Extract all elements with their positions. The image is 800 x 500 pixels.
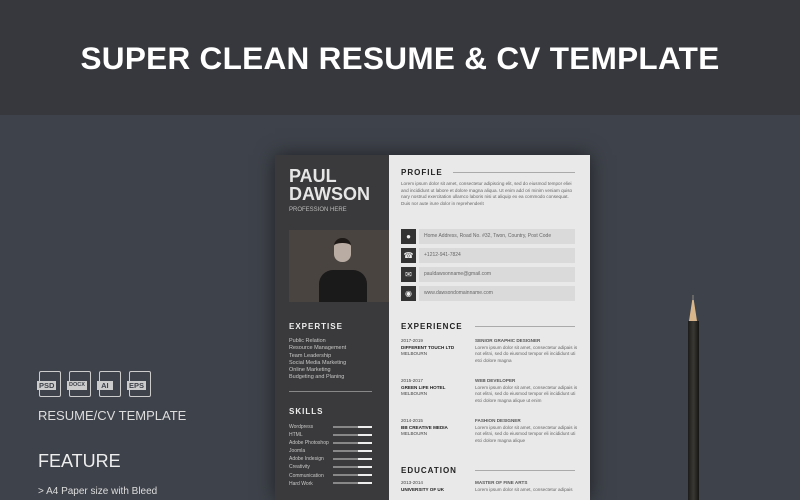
feature heading: FEATURE (38, 451, 121, 471)
education entry: MASTER OF FINE ARTS (475, 480, 527, 485)
icons: file formats: PSD (39, 381, 54, 390)
skills list with bars: HTML (289, 432, 303, 438)
subtitle: RESUME/CV TEMPLATE (38, 408, 186, 423)
skills list with bars: Creativity (289, 464, 310, 470)
contact list: www.dawsondomainname.com (424, 290, 493, 296)
name (289, 166, 370, 204)
education heading: EDUCATION (401, 466, 457, 475)
contact list: pauldawsonname@gmail.com (424, 271, 491, 277)
icons: file formats (37, 371, 151, 397)
pencil (688, 295, 699, 500)
contact list: ● (406, 232, 411, 241)
skills list with bars: Communication (289, 473, 324, 479)
contact list: ☎ (404, 251, 413, 260)
experience entries (401, 338, 577, 443)
header band (0, 0, 800, 115)
skills list with bars: Joomla (289, 448, 305, 454)
skills heading: SKILLS (289, 407, 323, 416)
contact list (401, 229, 575, 301)
expertise list: Budgeting and Planing (289, 374, 344, 380)
education entry: UNIVERSITY OF UK (401, 486, 444, 492)
expertise list: Public Relation (289, 338, 326, 344)
expertise list: Resource Management (289, 345, 346, 351)
experience entries: 2014-2015 (401, 418, 423, 423)
experience entries: SENIOR GRAPHIC DESIGNER (475, 338, 540, 343)
experience entries: 2015-2017 (401, 378, 423, 383)
name: DAWSON (289, 184, 370, 204)
expertise list: Social Media Marketing (289, 360, 346, 366)
experience entries: Lorem ipsum dolor sit amet, consectetur adipais is not elitni, sed do eiusmod tempor eli incididunt uti etci dolore magna alique ut enim (475, 384, 577, 402)
title: SUPER CLEAN RESUME & CV TEMPLATE (80, 40, 720, 76)
experience entries: MELBOURN (401, 351, 427, 356)
experience entries: 2017-2019 (401, 338, 423, 343)
profile text: Lorem ipsum dolor sit amet, consectetur adipiscing elit, sed do eiusmod tempor eliei and incididunt ut labore et dolore magna aliqua. Ut enim add ori minim veniam quiso nary nostrud exercitation ullamco laboris nisi ut aliquip ex ea commodo consequat. Duis nor aute irure dolor in reprehenderit (401, 181, 572, 206)
left info panel (37, 371, 186, 497)
icons: file formats: EPS (129, 381, 144, 390)
experience entries: GREEN LIFE HOTEL (401, 384, 445, 390)
name: PAUL (289, 166, 337, 186)
experience entries: MELBOURN (401, 391, 427, 396)
experience entries: BB CREATIVE MEDIA (401, 424, 448, 430)
contact list: +1212-941-7824 (424, 252, 461, 258)
expertise list: Online Marketing (289, 367, 331, 373)
experience entries: Lorem ipsum dolor sit amet, consectetur adipais is not elitni, sed do eiusmod tempor eli incididunt uti etci dolore magna alique (475, 424, 577, 442)
skills list with bars: Adobe Indesign (289, 456, 324, 462)
panel: left sidebar (275, 155, 389, 500)
photo (289, 230, 389, 302)
contact list: Home Address, Road No. #32, Twon, Country, Post Code (424, 233, 551, 239)
contact list: ◉ (405, 289, 412, 298)
contact list: ✉ (405, 270, 412, 279)
experience entries: DIFFERENT TOUCH LTD (401, 344, 454, 350)
skills list with bars: Hard Work (289, 481, 313, 487)
education entry: 2013-2014 (401, 480, 423, 485)
icons: file formats: DOCX (69, 382, 85, 388)
icons: file formats: AI (101, 381, 109, 390)
profile heading: PROFILE (401, 168, 443, 177)
skills list with bars (289, 424, 372, 487)
education entry (401, 480, 573, 492)
panel: right main (389, 155, 590, 500)
experience entries: MELBOURN (401, 431, 427, 436)
resume document (275, 155, 590, 500)
expertise list (289, 338, 346, 380)
expertise heading: EXPERTISE (289, 322, 343, 331)
education entry: Lorem ipsum dolor sit amet, consectetur adipais (475, 486, 573, 492)
experience entries: Lorem ipsum dolor sit amet, consectetur adipais is not elitni, sed do eiusmod tempor eli incididunt uti etci dolore magna (475, 344, 577, 362)
experience entries: FASHION DESIGNER (475, 418, 521, 423)
experience heading: EXPERIENCE (401, 322, 463, 331)
profession: PROFESSION HERE (289, 207, 347, 213)
feature item: > A4 Paper size with Bleed (38, 486, 157, 497)
experience entries: WEB DEVELOPER (475, 378, 515, 383)
skills list with bars: Adobe Photoshop (289, 440, 329, 446)
skills list with bars: Wordpress (289, 424, 313, 430)
expertise list: Team Leadership (289, 353, 331, 359)
